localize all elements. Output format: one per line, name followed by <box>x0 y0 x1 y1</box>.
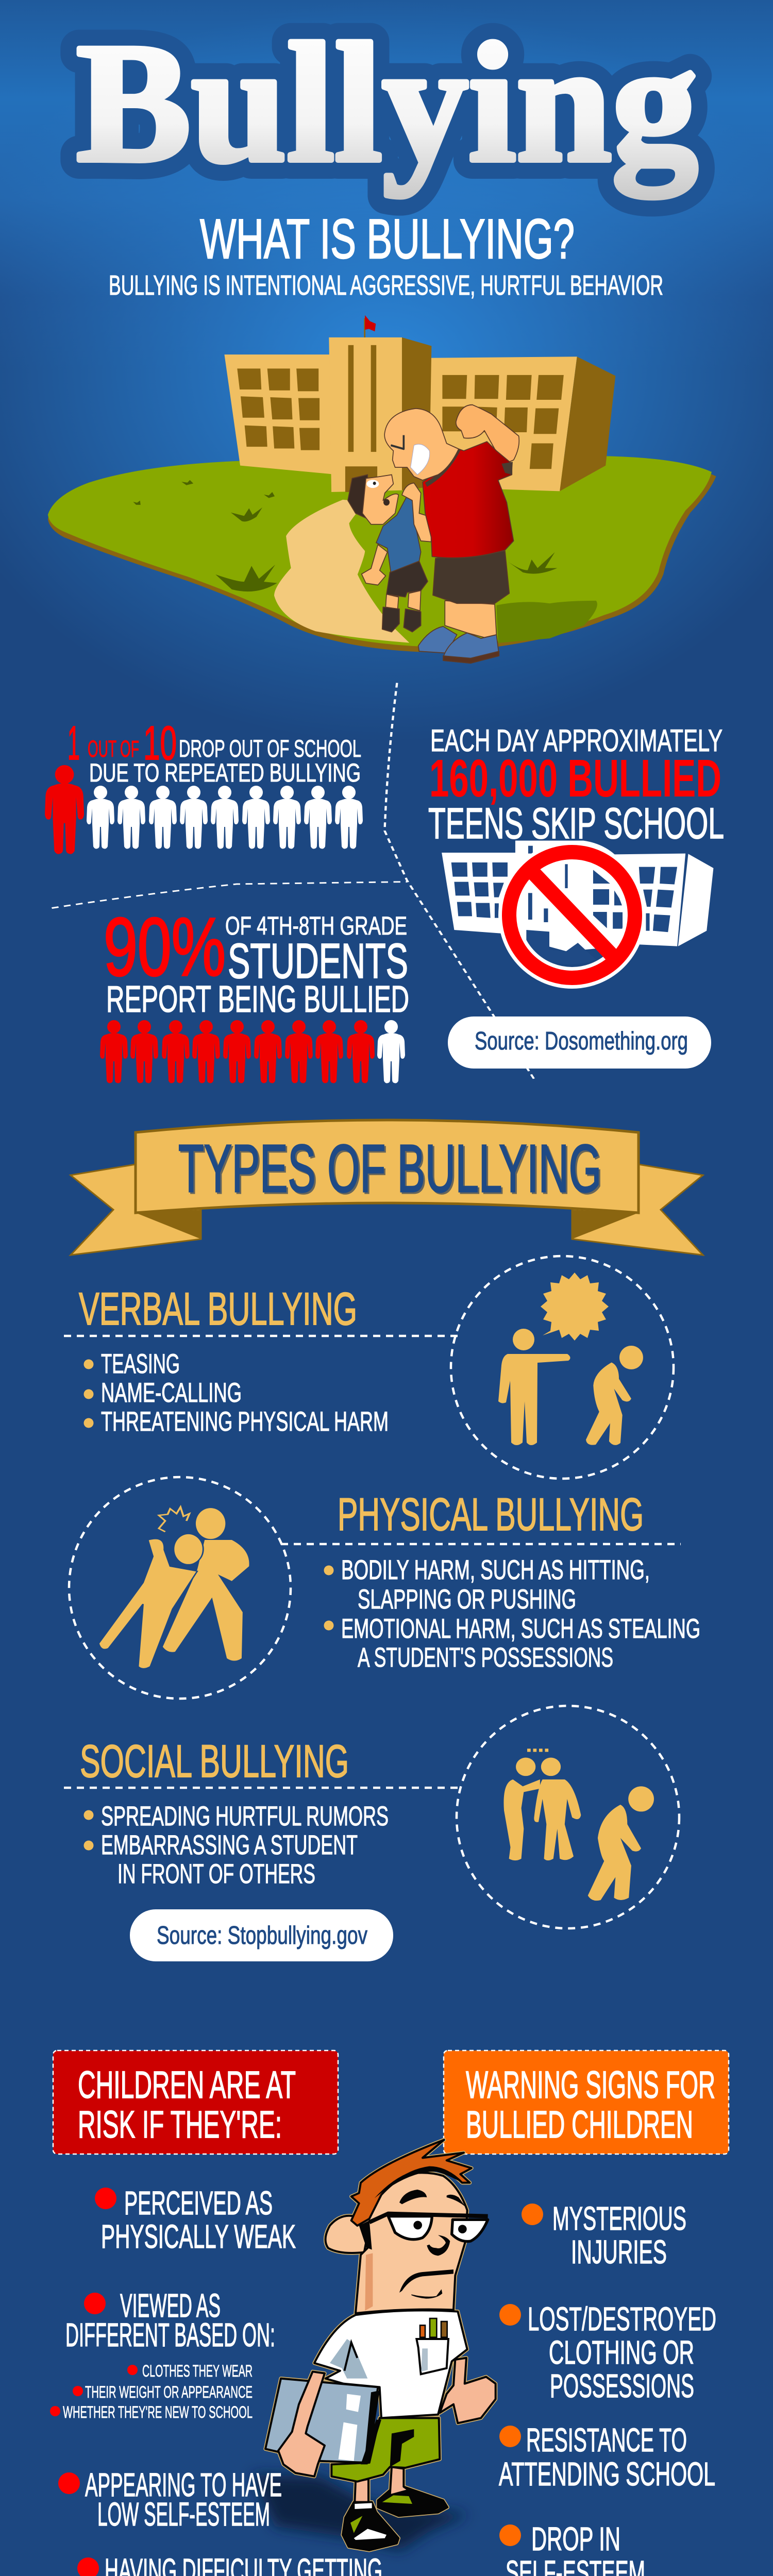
stat text <box>104 901 409 1020</box>
list: risk factors: DIFFERENT BASED ON: <box>65 2316 275 2353</box>
list: physical examples: BODILY HARM, SUCH AS HITTING, <box>341 1555 650 1585</box>
icon: person shouting at a hunched student <box>451 1256 674 1479</box>
source pill: Stopbullying.gov: Source: Stopbullying.gov <box>157 1922 367 1950</box>
list: social examples: EMBARRASSING A STUDENT <box>101 1830 358 1860</box>
stat text: 90% <box>104 901 226 993</box>
school building <box>224 315 615 492</box>
list: verbal examples: TEASING <box>101 1349 180 1379</box>
list: risk factors <box>50 2184 382 2576</box>
book spine <box>364 2391 380 2464</box>
source pill: Dosomething.org <box>448 1016 711 1069</box>
stat text: 10 <box>143 716 177 770</box>
hairline <box>359 2167 462 2250</box>
icon: two figures whispering about a student <box>457 1706 679 1928</box>
heading: verbal bullying: VERBAL BULLYING <box>79 1283 357 1334</box>
victim boy <box>348 474 431 632</box>
source pill: Dosomething.org: Source: Dosomething.org <box>475 1027 688 1055</box>
list: physical examples: SLAPPING OR PUSHING <box>358 1584 576 1615</box>
stat text: REPORT BEING BULLIED <box>106 979 409 1020</box>
stat text: STUDENTS <box>228 934 408 989</box>
stat text: DROP OUT OF SCHOOL <box>179 735 361 762</box>
title: Bullying: Bullying <box>76 8 698 200</box>
banner: types of bullying <box>71 1120 703 1255</box>
list: verbal examples: THREATENING PHYSICAL HARM <box>101 1406 389 1437</box>
list: risk factors: WHETHER THEY'RE NEW TO SCHOOL <box>63 2403 253 2421</box>
illustration: bully and victim <box>348 405 597 663</box>
stat: 90% of students <box>100 901 409 1083</box>
eyebrows, nose, mouth <box>399 2190 465 2299</box>
statistics dashed dividers <box>52 683 535 1081</box>
illustration: sad student with glasses <box>253 2140 496 2550</box>
box: warning signs <box>444 2050 729 2154</box>
box: children at risk <box>53 2050 338 2154</box>
stat text: 1 <box>68 716 80 770</box>
glasses <box>369 2214 488 2242</box>
bully <box>384 405 519 663</box>
list: warning signs <box>499 2200 716 2576</box>
icon: two figures fighting <box>69 1477 291 1699</box>
panel: social bullying <box>64 1706 679 1961</box>
list: social examples: SPREADING HURTFUL RUMORS <box>101 1801 389 1832</box>
body outline <box>265 2140 496 2550</box>
list: verbal examples <box>83 1349 389 1437</box>
list: warning signs: CLOTHING OR <box>549 2334 694 2371</box>
list: warning signs: MYSTERIOUS <box>552 2200 686 2237</box>
list: risk factors: APPEARING TO HAVE <box>85 2466 282 2503</box>
grass tufts <box>133 480 557 591</box>
heading: social bullying: SOCIAL BULLYING <box>80 1735 349 1787</box>
stat text <box>68 716 361 787</box>
list: risk factors: PHYSICALLY WEAK <box>101 2218 296 2255</box>
list: physical examples: A STUDENT'S POSSESSIONS <box>358 1642 613 1673</box>
box: children at risk: RISK IF THEY'RE: <box>78 2103 282 2146</box>
shadow on the grass <box>496 601 597 643</box>
box: children at risk: CHILDREN ARE AT <box>78 2063 296 2106</box>
list: risk factors: VIEWED AS <box>120 2287 221 2324</box>
list: physical examples <box>324 1555 700 1673</box>
source pill: Stopbullying.gov <box>130 1909 393 1961</box>
list: risk factors: PERCEIVED AS <box>124 2184 273 2222</box>
stat: 1 out of 10 <box>45 716 363 854</box>
grass island <box>48 456 716 653</box>
stat text: OUT OF <box>88 736 139 762</box>
panel: physical bullying <box>69 1477 700 1699</box>
icon: school with prohibition sign <box>442 841 713 978</box>
cast shadow <box>253 2475 469 2550</box>
stat text: OF 4TH-8TH GRADE <box>225 911 407 940</box>
illustration: school and grass <box>48 315 716 653</box>
pictogram: 9 red of 10 students <box>100 1020 405 1083</box>
list: verbal examples: NAME-CALLING <box>101 1378 242 1408</box>
list: social examples <box>83 1801 389 1889</box>
pocket and pens <box>416 2318 448 2374</box>
list: risk factors: LOW SELF-ESTEEM <box>97 2496 270 2533</box>
heading: what is bullying: WHAT IS BULLYING? <box>200 208 575 270</box>
neck shade and sleeve folds <box>330 2253 373 2379</box>
panel: verbal bullying <box>64 1256 674 1479</box>
list: social examples: IN FRONT OF OTHERS <box>117 1859 315 1889</box>
list: warning signs: DROP IN <box>531 2520 620 2557</box>
sand path <box>274 500 409 643</box>
list: risk factors: CLOTHES THEY WEAR <box>142 2362 253 2380</box>
shoe details <box>350 2495 412 2540</box>
shorts fold <box>361 2420 414 2467</box>
title: Bullying: Bullying <box>76 8 698 200</box>
stat: 160,000 teens skip school <box>428 723 724 848</box>
pictogram: 1 red of 10 students <box>45 765 363 854</box>
body parts <box>265 2140 496 2550</box>
list: risk factors: THEIR WEIGHT OR APPEARANCE <box>85 2383 253 2401</box>
list: warning signs: INJURIES <box>571 2233 667 2270</box>
stat text: DUE TO REPEATED BULLYING <box>89 758 361 787</box>
book highlights <box>339 2394 361 2461</box>
